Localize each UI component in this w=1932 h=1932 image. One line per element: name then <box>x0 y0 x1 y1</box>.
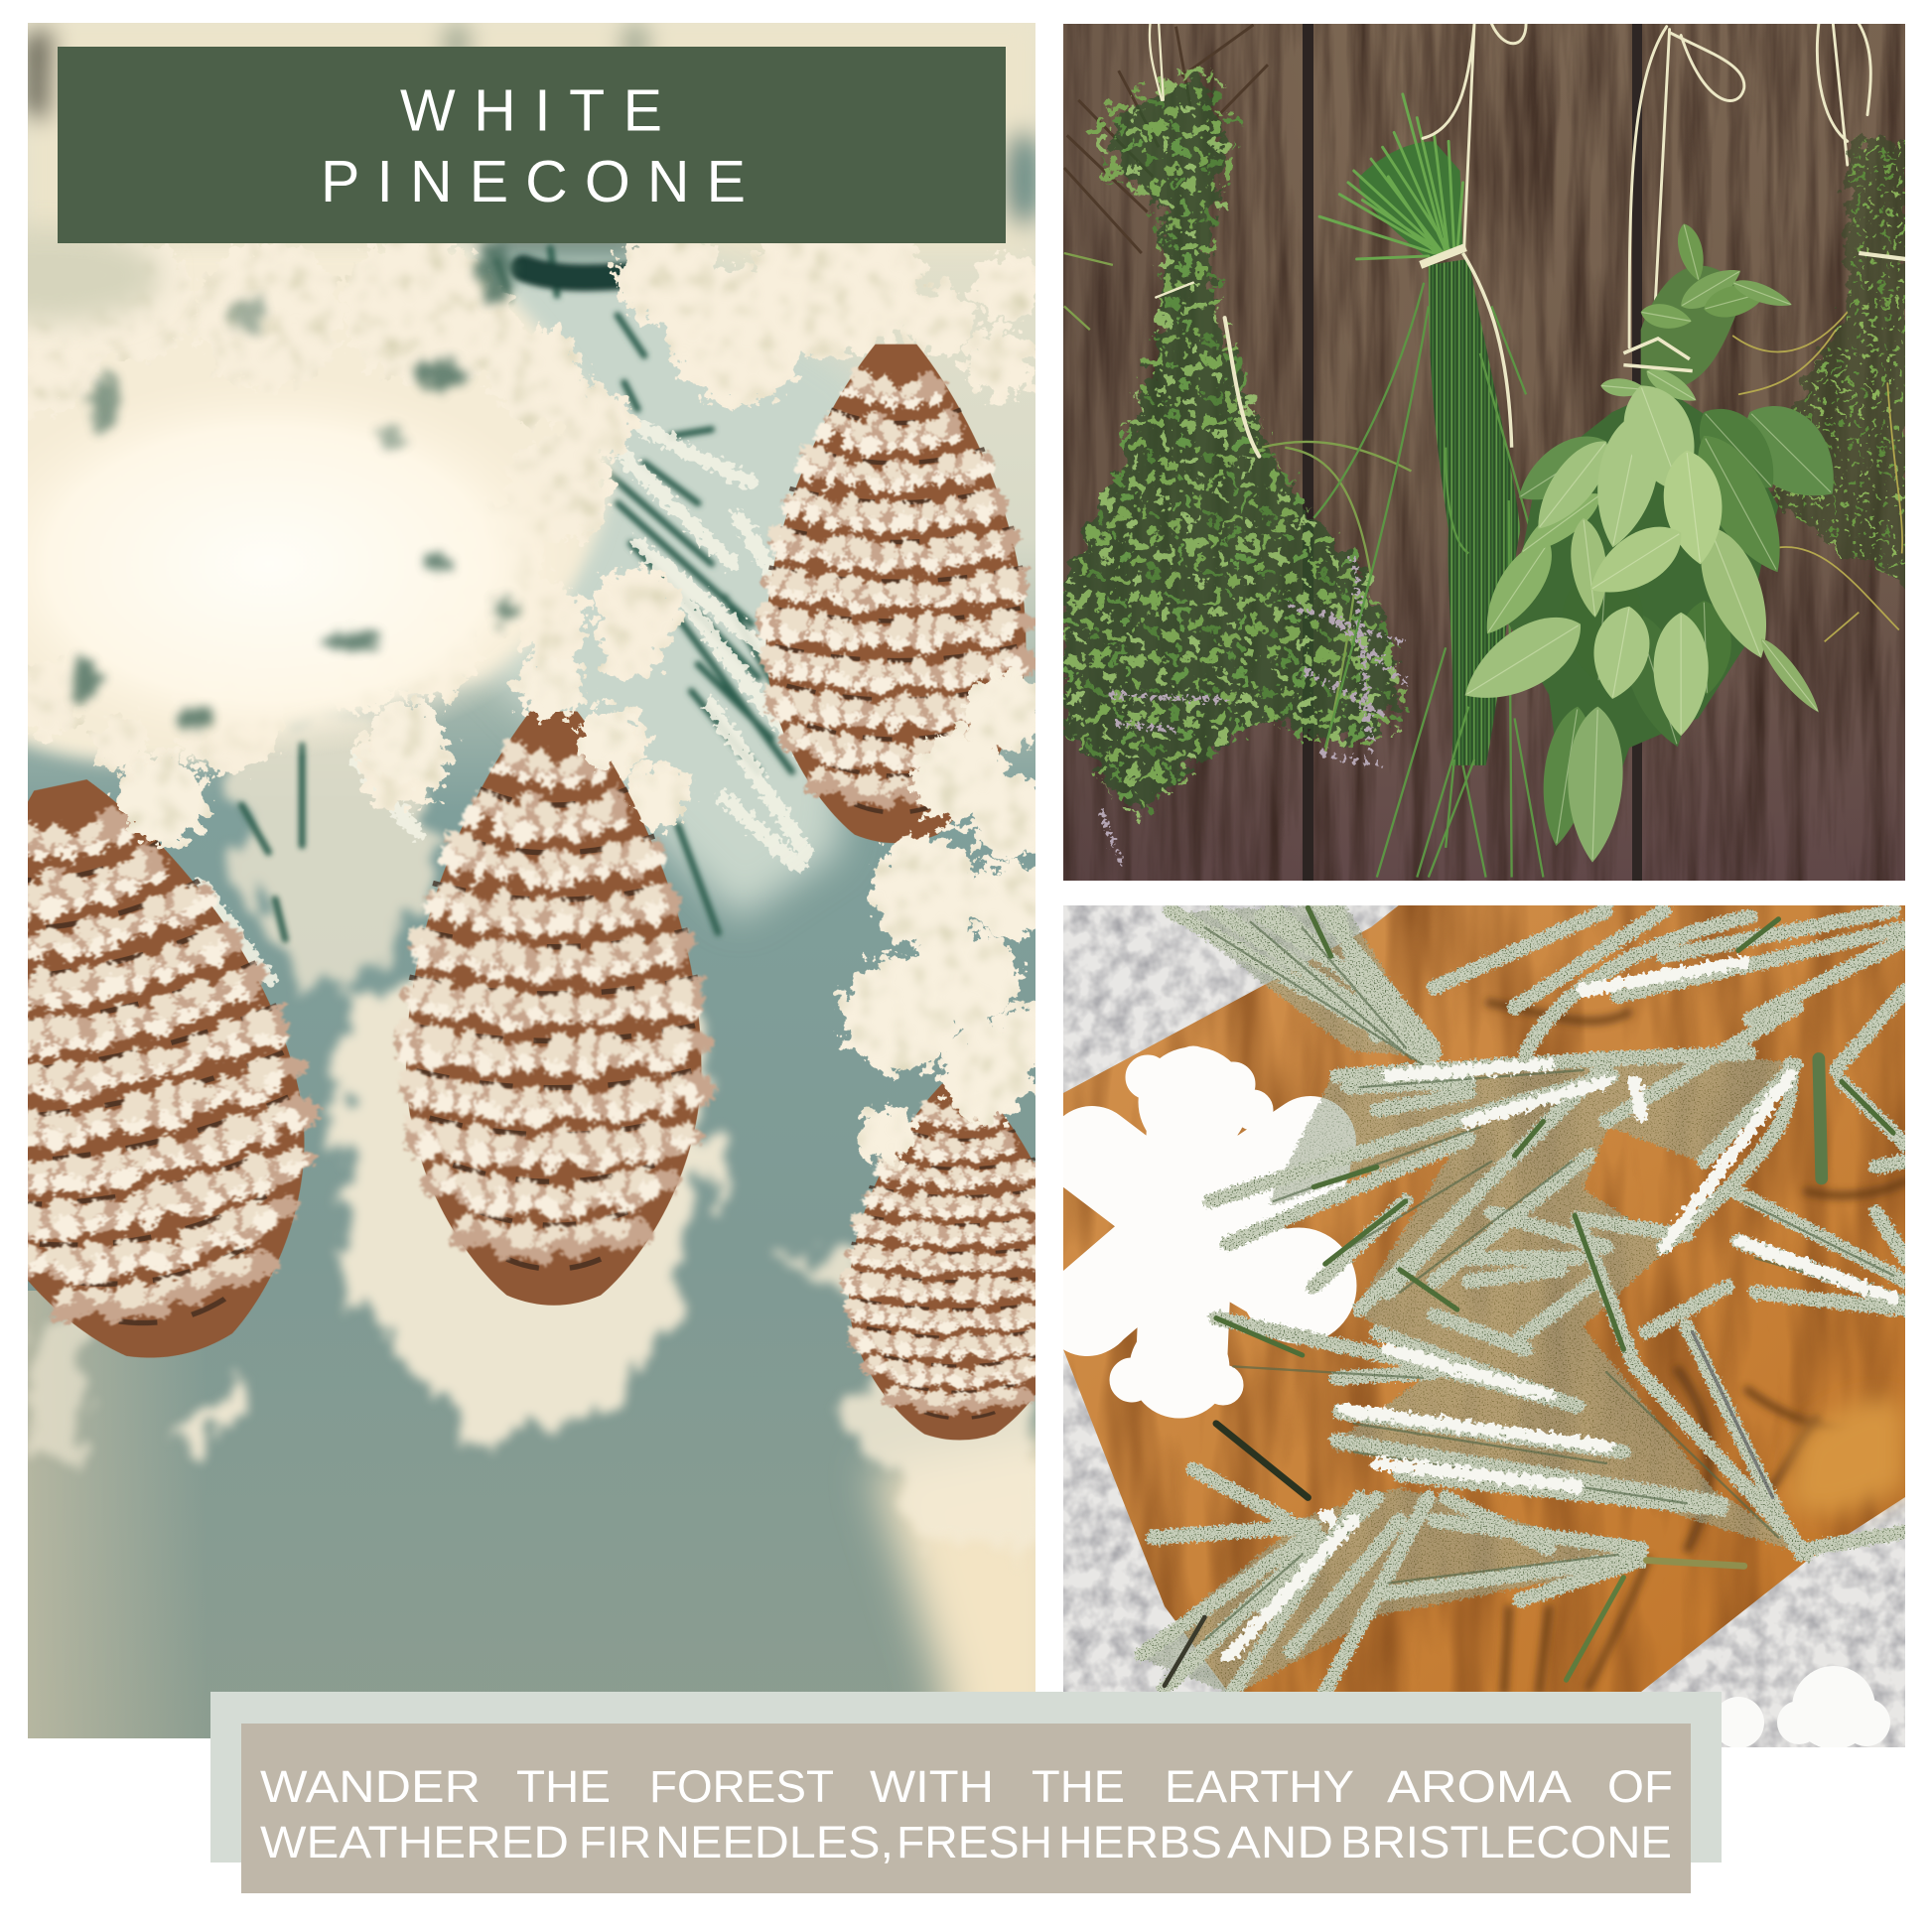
wood planks <box>1063 24 1905 881</box>
caption text line 1 <box>260 1761 1673 1812</box>
frosted needles <box>1142 907 1905 1692</box>
white halo on needles <box>202 430 805 980</box>
caption backing <box>210 1692 1722 1863</box>
panel: frosted pinecones photo <box>0 22 1072 1767</box>
wooden board <box>1063 904 1905 1692</box>
small salt flakes bottom right <box>1713 1666 1890 1749</box>
caption text line 1: EARTHY <box>1165 1761 1354 1812</box>
herb bundle: oregano leaves <box>1063 59 1406 819</box>
centre cone <box>406 711 701 1306</box>
title banner <box>58 47 1006 243</box>
string: left bundle <box>1150 24 1259 457</box>
sage bundle: bright front leaves <box>1470 530 1566 645</box>
thyme leaves <box>1773 141 1910 589</box>
caption text line 2: NEEDLES, <box>655 1817 894 1867</box>
sage shadow mass <box>1509 388 1778 812</box>
needle zone behind snow <box>202 248 873 980</box>
snow, needles and cones <box>0 191 1070 1441</box>
top right cone <box>766 345 1026 843</box>
panel: dried herbs photo <box>1063 24 1910 881</box>
dark needles <box>241 248 792 939</box>
left cone <box>0 750 347 1390</box>
green needle cores <box>1165 907 1893 1686</box>
shaded top left of snow <box>0 228 161 322</box>
large snow mass <box>0 191 1040 846</box>
bottom right cone <box>849 1084 1070 1441</box>
snow clumps <box>0 191 1040 846</box>
caption text line 1: WANDER <box>260 1761 481 1812</box>
rosemary in reference coordinates <box>1142 907 1905 1692</box>
caption text line 2: BRISTLECONE <box>1340 1817 1672 1867</box>
caption front <box>241 1724 1691 1893</box>
blurred frost behind the centre cone <box>28 715 1035 1549</box>
caption text line 1: THE <box>516 1761 611 1812</box>
bright snow centre <box>0 369 584 759</box>
caption panel <box>210 1692 1722 1893</box>
caption text line 2: FIR <box>579 1817 651 1867</box>
frosted masses <box>1142 907 1802 1692</box>
bright sugar clumps <box>1228 962 1893 1657</box>
strings: hanging loops <box>1423 24 1870 347</box>
top sprig leaves <box>1675 259 1747 318</box>
right side snow column <box>840 671 1056 1163</box>
snow on top of centre cone <box>121 657 689 845</box>
photo backdrop <box>28 23 1035 1738</box>
herbs in reference coordinates <box>1063 24 1910 878</box>
caption text line 1: WITH <box>870 1761 994 1812</box>
caption text line 2: WEATHERED <box>260 1817 569 1867</box>
thyme stems <box>1732 253 1905 641</box>
panel: sugared rosemary photo <box>1046 904 1905 1749</box>
top strip of blurred branches <box>28 23 1035 266</box>
caption text line 2: HERBS <box>1058 1817 1222 1867</box>
herb bundle: oregano backing <box>1063 76 1395 807</box>
salt background <box>1063 905 1905 1747</box>
caption text line 1: OF <box>1607 1761 1673 1812</box>
caption text line 1: THE <box>1032 1761 1125 1812</box>
title text: PINECONE <box>321 149 746 214</box>
caption text line 2 <box>260 1817 1672 1867</box>
title text <box>321 77 746 214</box>
thyme bundle <box>1773 141 1910 589</box>
sage bundle <box>1450 220 1858 864</box>
title text: WHITE <box>400 77 662 143</box>
caption text line 1: FOREST <box>649 1761 834 1812</box>
dark flecks in snow <box>69 245 514 729</box>
white snowflake <box>1046 1046 1356 1418</box>
oregano side sprigs <box>1064 253 1411 754</box>
twigs <box>1064 25 1268 253</box>
left edge vignette <box>28 1291 178 1738</box>
needle separation lines <box>1204 922 1893 1640</box>
chives bundle <box>1313 94 1543 878</box>
cream glow in bottom corner <box>853 1412 1035 1692</box>
caption text line 2: FRESH <box>897 1817 1052 1867</box>
caption text line 2: AND <box>1227 1817 1333 1867</box>
caption text line 1: AROMA <box>1387 1761 1572 1812</box>
thyme flowers <box>1101 559 1406 872</box>
